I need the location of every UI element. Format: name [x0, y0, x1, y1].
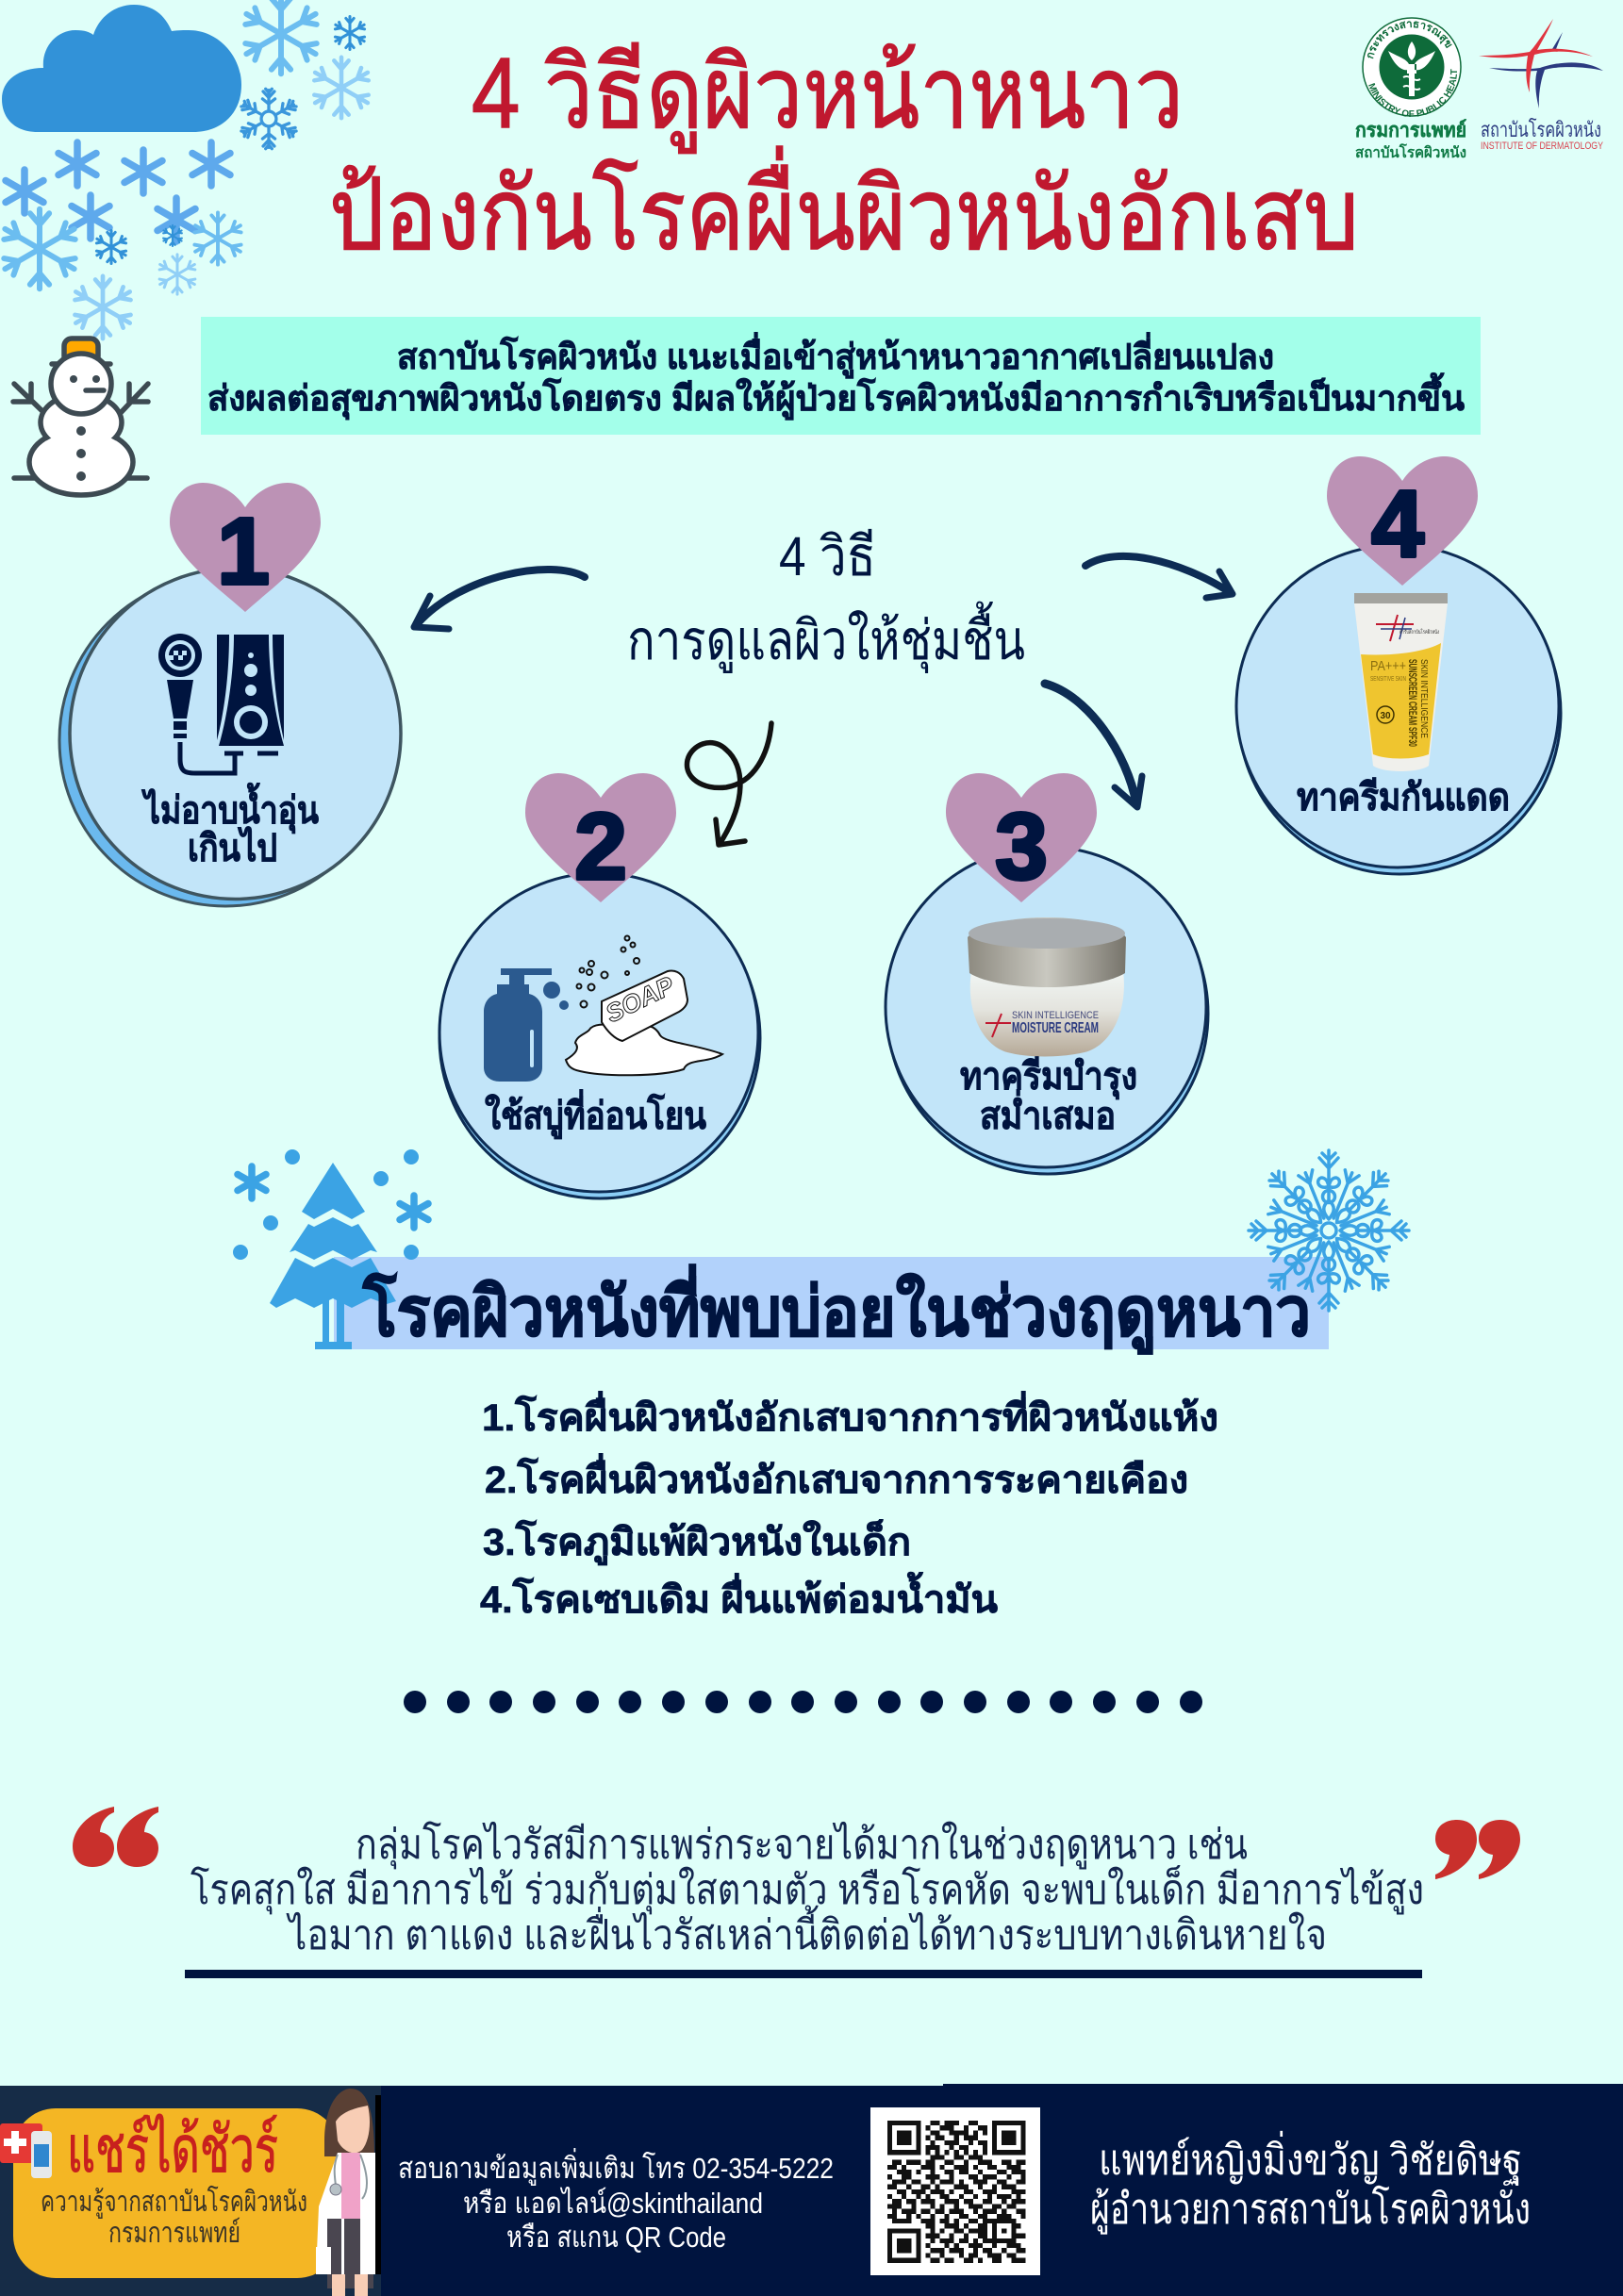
quote text: [190, 1821, 1424, 1958]
image: sunscreen tube: SKIN INTELLIGENCE: [1418, 659, 1429, 738]
center heading: 4 วิธี: [779, 526, 876, 587]
heart badge 4: [1327, 456, 1478, 586]
panel: step 2: ใช้สบู่ที่อ่อนโยน: [485, 1089, 706, 1139]
panel: step 3: ทาครีมบำรุง: [960, 1056, 1137, 1100]
logo: Department of Medical Services: กรมการแพทย์: [1355, 119, 1466, 141]
image: sunscreen tube: SUNSCREEN CREAM SPF30: [1406, 659, 1419, 747]
image: sunscreen tube: SENSITIVE SKIN: [1370, 676, 1406, 683]
heart badge 2: [525, 773, 676, 902]
icon: soap bottle: [484, 968, 569, 1082]
quote mark left: [73, 1807, 158, 1867]
panel: step 4: [1236, 456, 1561, 874]
image: moisture cream jar: [968, 917, 1126, 1056]
panel: step 4: ทาครีมกันแดด: [1297, 777, 1510, 818]
title: [329, 38, 1359, 271]
panel: step 1: [59, 483, 401, 906]
center heading: [627, 526, 1025, 674]
icon: soap bar with foam: SOAP: [601, 970, 679, 1028]
heart badge 1: [170, 483, 321, 612]
heart badge 2: 2: [574, 794, 627, 900]
heading band: common winter skin diseases: โรคผิวหนังที่พบบ่อยในช่วงฤดูหนาว: [362, 1264, 1311, 1355]
logo: Institute of Dermatology: [1479, 19, 1604, 152]
icon: large snowflake: [1249, 1150, 1409, 1311]
panel: step 3: [886, 773, 1208, 1174]
heart badge 1: 1: [217, 499, 270, 604]
director text: [1090, 2130, 1531, 2235]
rule: [185, 1970, 1422, 1978]
image: moisture cream jar: SKIN INTELLIGENCE: [1012, 1010, 1099, 1021]
heart badge 3: 3: [995, 794, 1048, 900]
image: sunscreen tube: ตำรับสถาบันโรคผิวหนัง: [1399, 628, 1439, 636]
heading band: common winter skin diseases: [233, 1149, 1409, 1355]
panel: step 2: [439, 773, 760, 1198]
panel: share badge: แชร์ได้ชัวร์: [67, 2113, 278, 2186]
list of diseases: 3.โรคภูมิแพ้ผิวหนังในเด็ก: [483, 1518, 911, 1565]
QR code: [870, 2107, 1040, 2275]
list of diseases: 4.โรคเซบเดิม ผื่นแพ้ต่อมน้ำมัน: [480, 1572, 998, 1621]
image: sunscreen tube: PA+++: [1370, 658, 1406, 674]
list of diseases: [480, 1391, 1218, 1621]
icon: snowman: [13, 339, 148, 495]
intro banner: ส่งผลต่อสุขภาพผิวหนังโดยตรง มีผลให้ผู้ป่วยโรคผิวหนังมีอาการกำเริบหรือเป็นมากขึ้น: [207, 372, 1465, 421]
image: sunscreen tube: 30: [1380, 711, 1391, 721]
quote mark right: [1435, 1820, 1520, 1879]
arrow to 4: [1085, 556, 1233, 598]
quote text: กลุ่มโรคไวรัสมีการแพร่กระจายได้มากในช่วงฤดูหนาว เช่น: [356, 1821, 1248, 1870]
contact text: หรือ สแกน QR Code: [506, 2221, 726, 2254]
icon: snow cloud with snowflakes: [0, 0, 372, 339]
heart badge 4: 4: [1371, 471, 1424, 577]
image: sunscreen tube: [1354, 593, 1448, 771]
footer: [0, 2084, 1623, 2296]
arrow to 3: [1045, 684, 1142, 807]
intro banner: [201, 317, 1481, 435]
panel: share badge: กรมการแพทย์: [108, 2217, 240, 2249]
title: 4 วิธีดูผิวหน้าหนาว: [472, 38, 1184, 154]
logo: Department of Medical Services: กระทรวงสาธารณสุข: [1367, 21, 1452, 58]
panel: step 1: เกินไป: [188, 826, 277, 869]
quote text: โรคสุกใส มีอาการไข้ ร่วมกับตุ่มใสตามตัว หรือโรคหัด จะพบในเด็ก มีอาการไข้สูง: [190, 1865, 1424, 1915]
contact text: สอบถามข้อมูลเพิ่มเติม โทร 02-354-5222: [398, 2148, 834, 2186]
list of diseases: 1.โรคผื่นผิวหนังอักเสบจากการที่ผิวหนังแห้ง: [482, 1391, 1218, 1439]
panel: step 3: สม่ำเสมอ: [980, 1089, 1116, 1137]
icon: cloud: [2, 5, 241, 132]
list of diseases: 2.โรคผื่นผิวหนังอักเสบจากการระคายเคือง: [485, 1453, 1188, 1501]
icon: winter tree: [233, 1149, 428, 1349]
quote text: ไอมาก ตาแดง และฝื่นไวรัสเหล่านี้ติดต่อได้ทางระบบทางเดินหายใจ: [286, 1905, 1327, 1958]
title: ป้องกันโรคผื่นผิวหนังอักเสบ: [329, 146, 1359, 271]
panel: share badge: ความรู้จากสถาบันโรคผิวหนัง: [41, 2185, 307, 2219]
logo: Department of Medical Services: สถาบันโรคผิวหนัง: [1355, 142, 1466, 161]
icon: doctor: [316, 2089, 381, 2296]
director text: แพทย์หญิงมิ่งขวัญ วิชัยดิษฐ: [1099, 2130, 1522, 2186]
dotted divider: [404, 1691, 1202, 1713]
intro banner: สถาบันโรคผิวหนัง แนะเมื่อเข้าสู่หน้าหนาวอากาศเปลี่ยนแปลง: [397, 332, 1274, 379]
panel: share badge: [0, 2108, 340, 2278]
center heading: การดูแลผิวให้ชุ่มชื้น: [627, 602, 1025, 674]
image: moisture cream jar: MOISTURE CREAM: [1012, 1020, 1099, 1036]
logo: Department of Medical Services: [1355, 17, 1467, 161]
arrow to 1: [414, 570, 585, 629]
heart badge 3: [946, 773, 1097, 902]
contact text: [398, 2148, 834, 2254]
icon: soap bar with foam: [566, 935, 722, 1075]
icon: shower and water heater: [158, 634, 284, 773]
panel: step 1: ไม่อาบน้ำอุ่น: [141, 783, 319, 834]
contact text: หรือ แอดไลน์@skinthailand: [463, 2187, 763, 2220]
arrow to 2 loop: [687, 723, 771, 845]
